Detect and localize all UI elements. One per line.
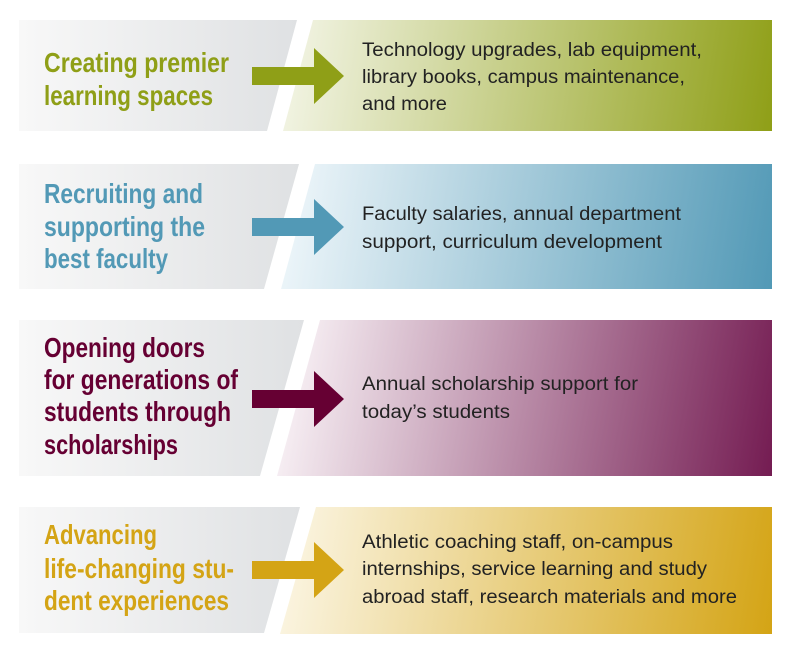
text: learning spaces description: library books, campus maintenance,	[362, 67, 685, 88]
text: faculty description: support, curriculum development	[362, 232, 663, 253]
text: student experiences description: abroad staff, research materials and more	[362, 587, 737, 608]
text: learning spaces description: Technology upgrades, lab equipment,	[362, 40, 702, 61]
arrow: green	[252, 48, 344, 104]
heading: advancing life-changing student experiences	[44, 519, 234, 616]
text: faculty description	[362, 204, 682, 253]
text: learning spaces description	[362, 40, 702, 115]
row: advancing life-changing student experiences	[19, 507, 772, 634]
heading: recruiting and supporting the best faculty: Recruiting and	[44, 178, 203, 209]
heading: advancing life-changing student experiences: life-changing stu-	[44, 553, 234, 584]
text: student experiences description: internships, service learning and study	[362, 559, 708, 580]
text: student experiences description	[362, 532, 737, 608]
panel: right description background	[281, 164, 772, 289]
row: opening doors through scholarships	[19, 320, 772, 476]
panel: left heading background	[19, 164, 299, 289]
text: scholarship description: Annual scholarship support for	[362, 374, 639, 395]
row: creating premier learning spaces	[19, 20, 772, 131]
heading: advancing life-changing student experiences: dent experiences	[44, 585, 229, 616]
panel: left heading background	[19, 320, 304, 476]
heading: advancing life-changing student experiences: Advancing	[44, 519, 157, 550]
panel: right description background	[283, 20, 772, 131]
heading: opening doors for generations of students through scholarships: students through	[44, 396, 231, 427]
heading: recruiting and supporting the best faculty	[44, 178, 205, 274]
heading: opening doors for generations of students through scholarships: for generations of	[44, 364, 239, 395]
panel: left heading background	[19, 20, 297, 131]
row: recruiting and supporting the best faculty	[19, 164, 772, 289]
text: faculty description: Faculty salaries, annual department	[362, 204, 682, 225]
panel: right description background	[280, 507, 772, 634]
heading: creating premier learning spaces: learning spaces	[44, 80, 213, 111]
heading: creating premier learning spaces: Creating premier	[44, 47, 229, 78]
heading: opening doors for generations of students through scholarships	[44, 332, 239, 460]
text: scholarship description	[362, 374, 639, 423]
panel: right description background	[277, 320, 772, 476]
heading: recruiting and supporting the best faculty: supporting the	[44, 211, 205, 242]
arrow: maroon	[252, 371, 344, 427]
text: scholarship description: today’s students	[362, 402, 510, 423]
panel: left heading background	[19, 507, 300, 633]
heading: opening doors for generations of students through scholarships: scholarships	[44, 429, 178, 460]
text: student experiences description: Athletic coaching staff, on-campus	[362, 532, 673, 553]
text: learning spaces description: and more	[362, 94, 447, 115]
arrow: blue	[252, 199, 344, 255]
heading: recruiting and supporting the best faculty: best faculty	[44, 243, 169, 274]
arrow: gold	[252, 542, 344, 598]
heading: opening doors for generations of students through scholarships: Opening doors	[44, 332, 205, 363]
heading: creating premier learning spaces	[44, 47, 229, 111]
